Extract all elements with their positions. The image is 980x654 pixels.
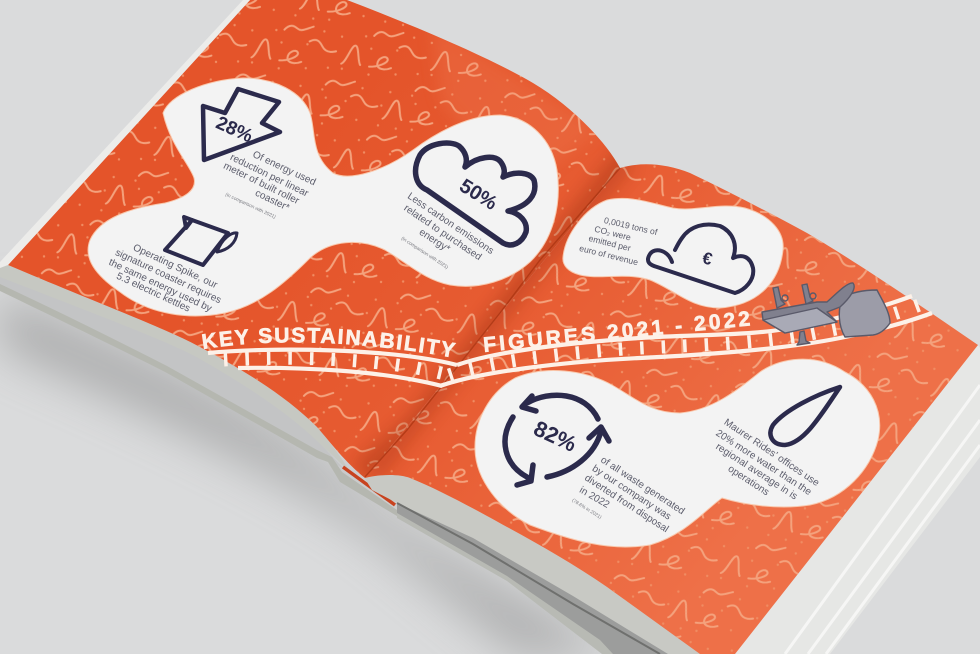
- text: kettle: the same energy used by: [107, 257, 213, 314]
- book shadow: [0, 295, 620, 654]
- text: waste: [571, 455, 686, 535]
- text: energy: Of energy used: [251, 149, 317, 188]
- text: kettle: signature coaster requires: [113, 247, 223, 306]
- icon: kettle: [165, 217, 237, 265]
- text: CO2: 0,0019 tons of: [603, 215, 659, 237]
- text: carbon: (in comparison with 2021): [400, 236, 450, 271]
- text: kettle: Operating Spike, our: [131, 242, 220, 291]
- text: waste: in 2022: [577, 485, 612, 511]
- text: energy: reduction per linear: [228, 152, 311, 200]
- red spine band: [343, 467, 395, 505]
- icon: recycle arrows: [505, 395, 609, 485]
- stat: 82%: 82%: [530, 416, 580, 457]
- text: waste: diverted from disposal: [582, 473, 670, 535]
- left page edge: [0, 0, 250, 268]
- panel: left blob: [88, 78, 558, 316]
- text: energy: [221, 149, 317, 221]
- page stack: fore edge: [735, 345, 980, 654]
- text: kettle: 5.3 electric kettles: [114, 271, 192, 315]
- page stack: left: [0, 265, 350, 472]
- icon: down arrow: [203, 89, 280, 160]
- text: waste: (78.6% in 2021): [571, 498, 603, 521]
- stat: 28%: 28%: [213, 113, 256, 147]
- icon: euro sign: €: [700, 248, 715, 269]
- left page: [0, 0, 640, 480]
- text: water: operations: [726, 464, 771, 498]
- icon: water drop: [770, 387, 840, 445]
- panel: bottom blob: [475, 359, 880, 547]
- text: CO2: emitted per: [588, 233, 632, 253]
- text: water: regional average in is: [714, 441, 799, 502]
- title: right part: FIGURES 2021 - 2022: [482, 307, 751, 357]
- text: energy: (in comparison with 2021): [224, 192, 277, 221]
- page fold: [365, 168, 620, 477]
- text: CO2: euro of revenue: [578, 243, 639, 267]
- track: right section: [440, 296, 932, 386]
- text: CO2: CO₂ were: [593, 224, 632, 242]
- text: waste: of all waste generated: [598, 455, 686, 517]
- text: carbon: energy*: [417, 227, 452, 255]
- text: CO2: [578, 215, 659, 267]
- icon: cloud 50%: [416, 143, 535, 245]
- page stack and gap: right: [362, 473, 700, 654]
- track: left section: [208, 350, 457, 386]
- text: carbon: Less carbon emissions: [405, 191, 496, 257]
- book cover and gap: left: [0, 276, 397, 516]
- text: waste: by our company was: [590, 463, 673, 522]
- text: water: Maurer Rides' offices use: [722, 417, 821, 489]
- text: energy: meter of built roller: [221, 161, 301, 207]
- illustration: roller coaster car: [762, 283, 890, 345]
- right page: [360, 160, 980, 654]
- text: energy: coaster*: [253, 188, 291, 214]
- stat: 50%: 50%: [455, 175, 501, 215]
- panel: top right blob: [563, 198, 783, 308]
- icon: euro cloud: [648, 224, 753, 293]
- text: water: 20% more water than the: [714, 428, 814, 498]
- text: carbon: related to purchased: [402, 203, 483, 263]
- title: left part: KEY SUSTAINABILITY: [202, 327, 456, 358]
